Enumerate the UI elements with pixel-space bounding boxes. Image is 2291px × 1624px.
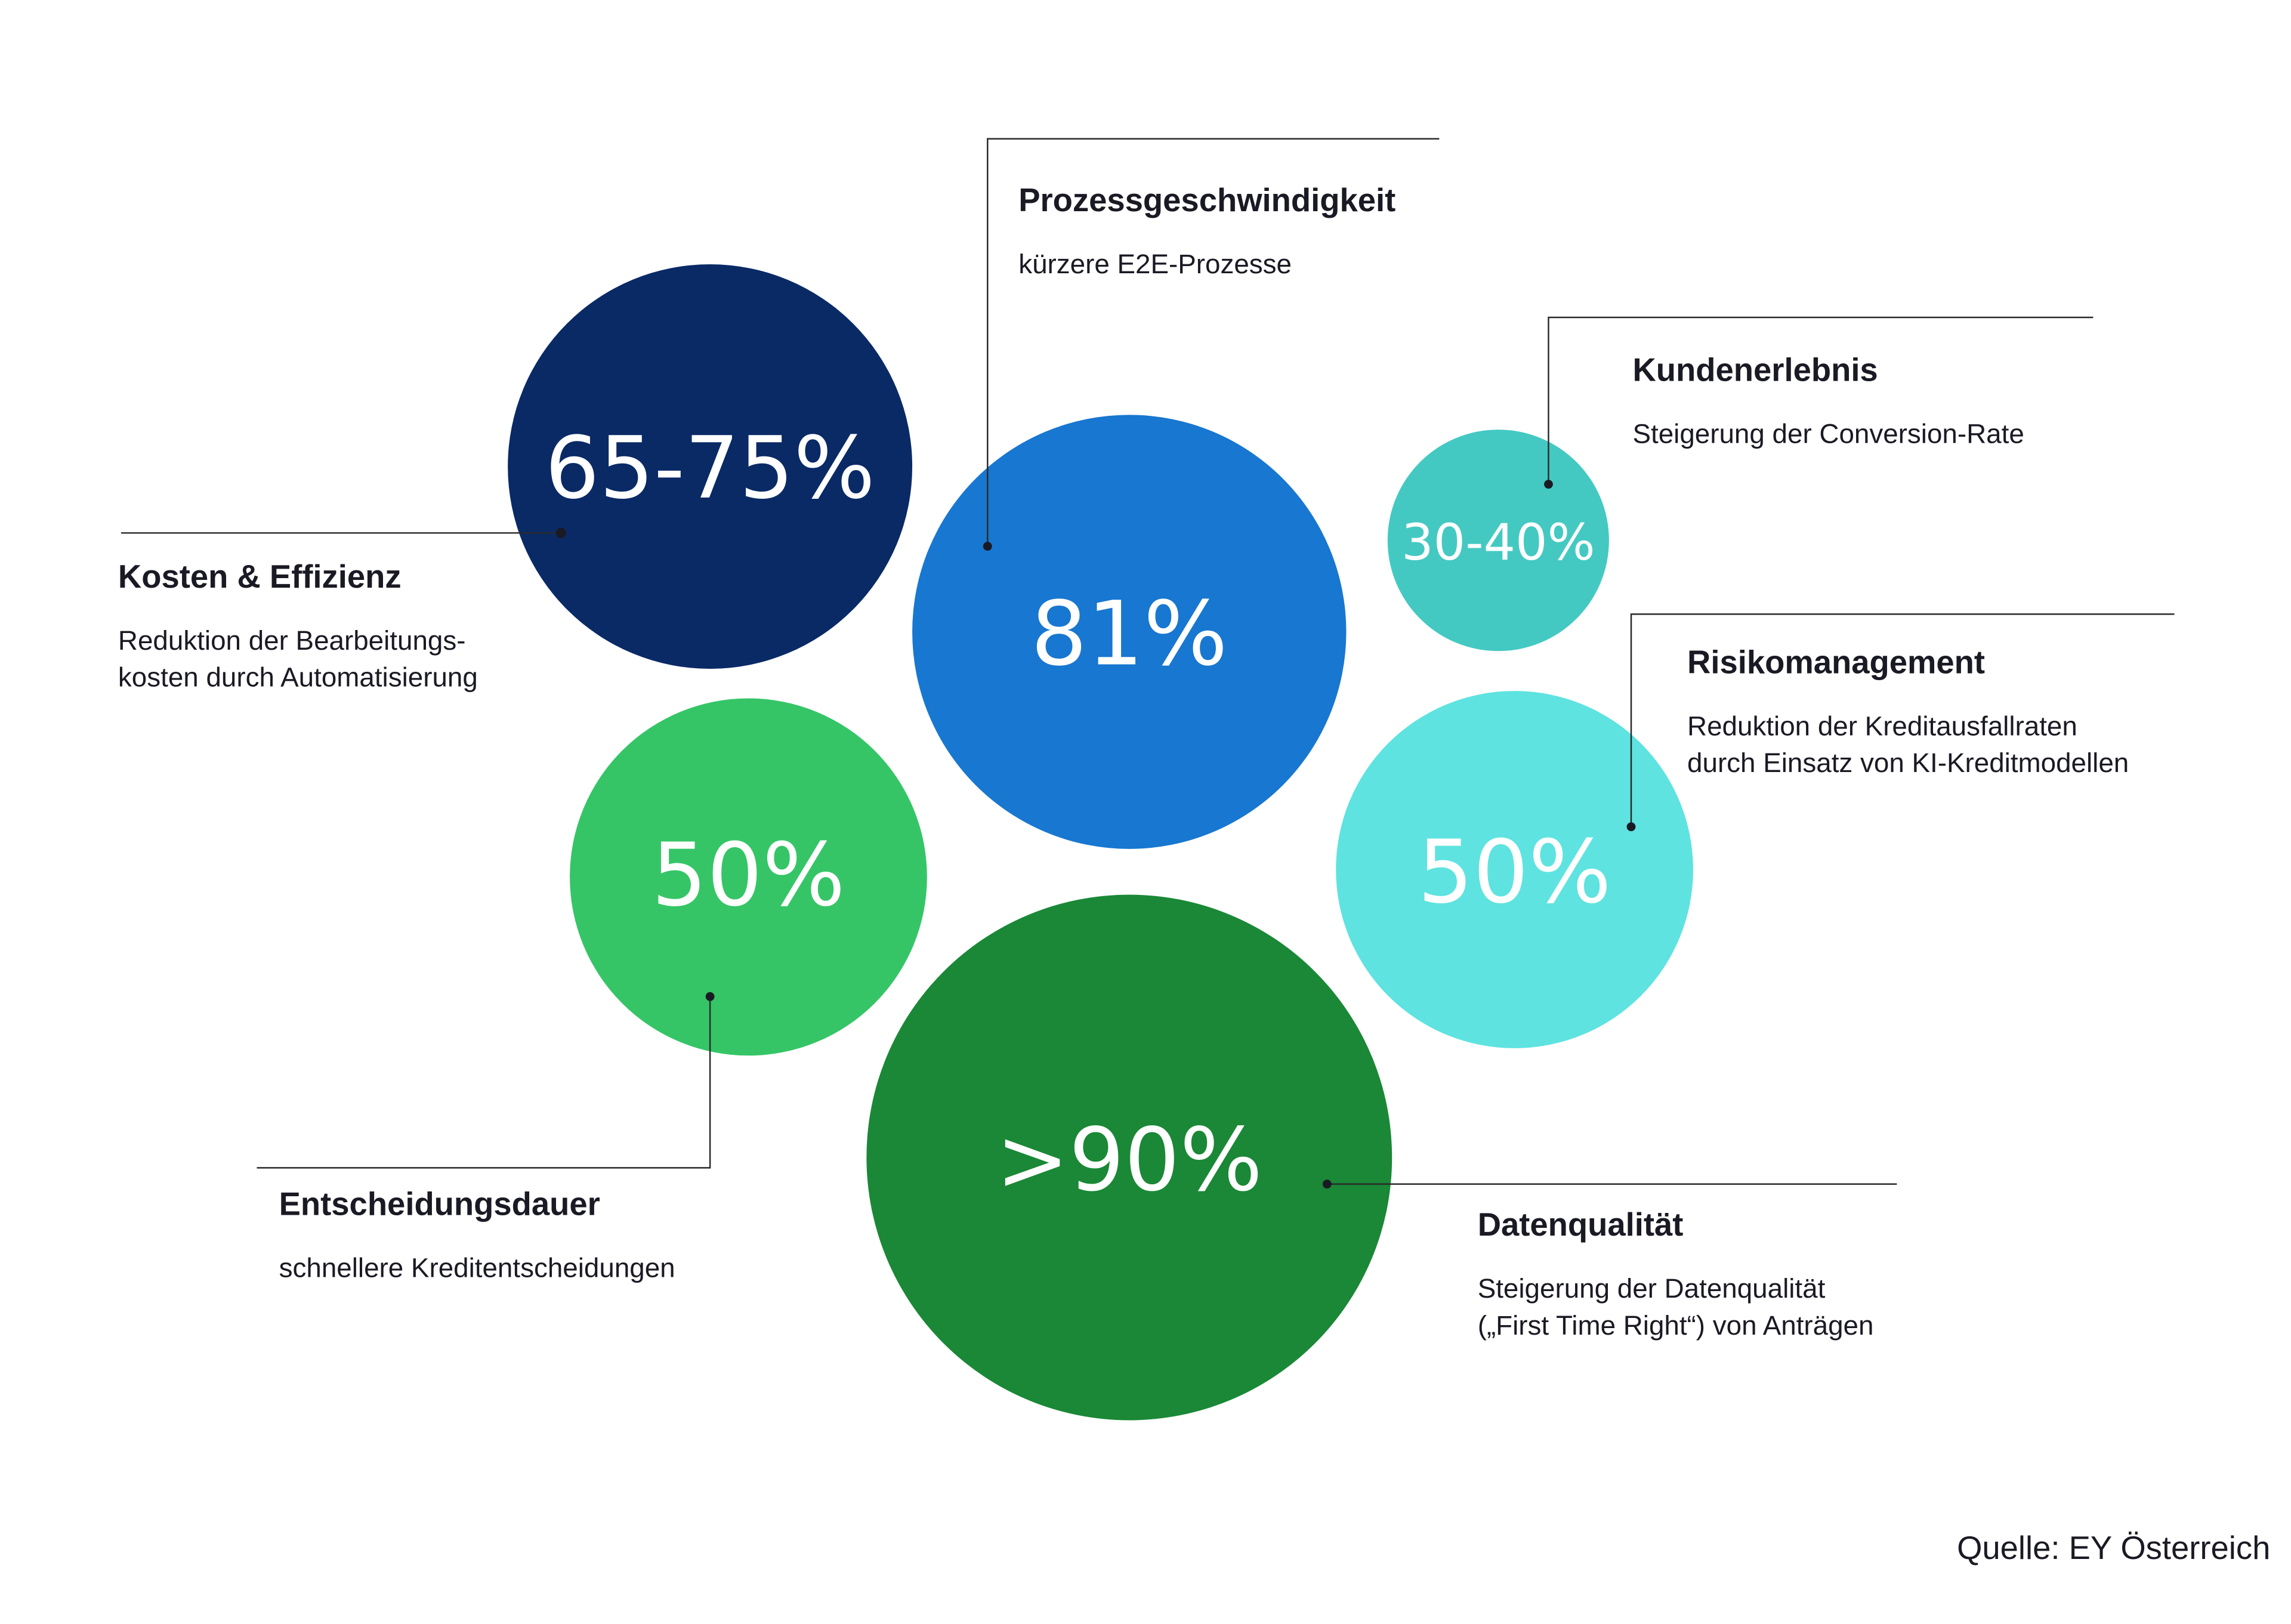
- callout: Kundenerlebnis: Steigerung der Conversion-Rate: [1632, 418, 2024, 449]
- callout: Kosten & Effizienz: [118, 528, 566, 693]
- callout: Kosten & Effizienz: kosten durch Automatisierung: [118, 662, 478, 693]
- circle: Datenqualität >90%: >90%: [996, 1109, 1262, 1211]
- source note: Quelle: EY Österreich: [1957, 1530, 2270, 1566]
- callout: Entscheidungsdauer: Entscheidungsdauer: [279, 1186, 600, 1222]
- circle: Risikomanagement 50%: [1336, 691, 1693, 1048]
- circle: Kundenerlebnis 30-40%: 30-40%: [1401, 513, 1595, 572]
- callout: Datenqualität: Datenqualität: [1478, 1206, 1683, 1243]
- circle: Kosten 65-75%: 65-75%: [545, 418, 875, 518]
- callout: Prozessgeschwindigkeit: kürzere E2E-Prozesse: [1018, 249, 1292, 279]
- callout: Risikomanagement: durch Einsatz von KI-Kreditmodellen: [1687, 748, 2129, 778]
- callout: Datenqualität: [1323, 1180, 1897, 1341]
- callout: Kundenerlebnis: [1544, 317, 2093, 489]
- circle: Prozessgeschwindigkeit 81%: 81%: [1031, 583, 1228, 686]
- circle: Datenqualität >90%: [866, 895, 1392, 1421]
- circle: Risikomanagement 50%: 50%: [1418, 822, 1611, 923]
- callout: Kosten & Effizienz: Kosten & Effizienz: [118, 558, 402, 595]
- circle: Entscheidungsdauer 50%: [570, 698, 927, 1055]
- callout: Kundenerlebnis: Kundenerlebnis: [1632, 351, 1878, 388]
- circle: Kundenerlebnis 30-40%: [1388, 430, 1609, 651]
- callout: Prozessgeschwindigkeit: Prozessgeschwindigkeit: [1018, 182, 1395, 218]
- circle: Entscheidungsdauer 50%: 50%: [652, 825, 845, 926]
- callout: Entscheidungsdauer: schnellere Kreditentscheidungen: [279, 1252, 675, 1283]
- circle: Prozessgeschwindigkeit 81%: [912, 415, 1346, 849]
- callout: Kosten & Effizienz: Reduktion der Bearbeitungs-: [118, 625, 466, 656]
- callout: Entscheidungsdauer: [257, 992, 715, 1283]
- callout: Risikomanagement: Risikomanagement: [1687, 644, 1985, 680]
- callout: Risikomanagement: [1627, 614, 2175, 831]
- circle: Kosten 65-75%: [508, 264, 912, 669]
- callout: Risikomanagement: Reduktion der Kreditausfallraten: [1687, 711, 2077, 741]
- callout: Datenqualität: („First Time Right“) von Anträgen: [1478, 1310, 1873, 1341]
- callout: Datenqualität: Steigerung der Datenqualität: [1478, 1273, 1826, 1304]
- callout: Prozessgeschwindigkeit: [983, 139, 1439, 551]
